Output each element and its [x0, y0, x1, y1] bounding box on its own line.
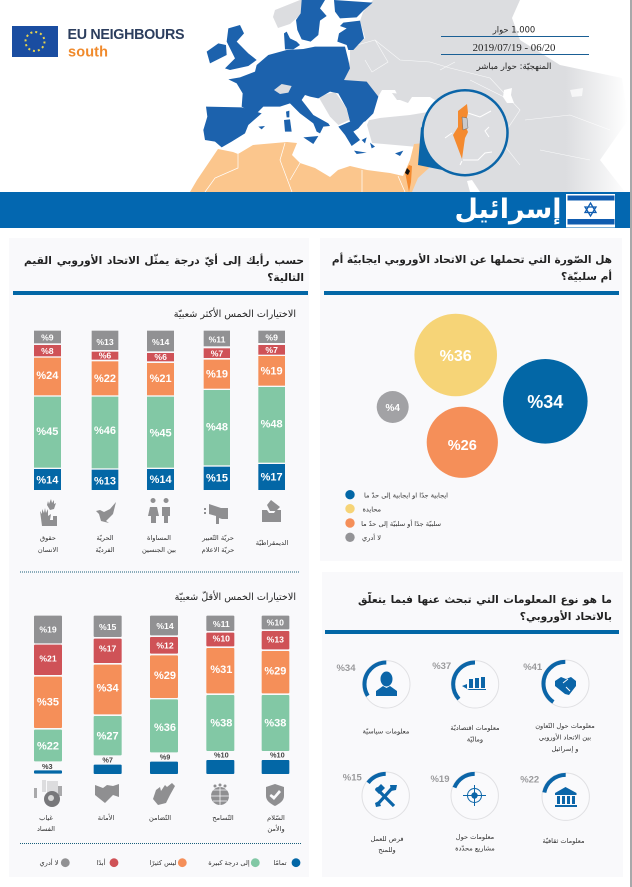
ring: cultural 22%: [520, 773, 589, 845]
subheading: least popular: الاختيارات الخمس الأقلّ شعبيّة: [175, 590, 296, 603]
label: peace and security: والأمن: [267, 824, 285, 833]
ring: projects 19%: معلومات حول: [456, 833, 494, 841]
ring: EU cooperation 41%: معلومات حول التّعاون: [535, 722, 595, 730]
bar: tolerance: %10: [213, 634, 230, 644]
label: absence of corruption: غياب: [39, 814, 53, 822]
header map: [190, 0, 628, 192]
bar: tolerance: %31: [210, 664, 232, 676]
panel: image of EU: [320, 238, 622, 561]
values legend: تمامًا: [273, 859, 287, 867]
bar: gender equality: %14: [152, 337, 170, 347]
bar: honesty: %7: [102, 756, 113, 765]
label: democracy: الديمقراطيّة: [256, 539, 288, 547]
bar: solidarity: %12: [156, 641, 174, 651]
label: gender equality: بين الجنسين: [142, 546, 176, 554]
heading: بالاتحاد الأوروبي؟: [520, 611, 612, 623]
bar: human rights: %24: [36, 370, 59, 382]
ring: projects 19%: مشاريع محدّدة: [455, 844, 495, 852]
bar: solidarity: %14: [156, 621, 174, 631]
logo wordmark: [68, 27, 184, 60]
values legend: أبدًا: [97, 858, 106, 867]
ring: economic 37%: %37: [432, 661, 451, 672]
bar: absence of corruption: %19: [39, 625, 57, 635]
ring: jobs and grants 15%: [343, 772, 409, 854]
bar: peace and security: [262, 616, 289, 774]
bar: human rights: %8: [41, 346, 54, 356]
values legend: لا أدري: [40, 858, 59, 867]
bar: freedom of expression: %48: [206, 422, 228, 434]
bar: freedom of expression: %15: [206, 473, 228, 485]
bar: honesty: %27: [97, 730, 119, 742]
bar: gender equality: %14: [150, 474, 173, 486]
bar: peace and security: %10: [267, 618, 284, 628]
icon: megaphone: [204, 504, 228, 524]
bar: individual freedom: %46: [94, 425, 116, 437]
ring: jobs and grants 15%: %15: [343, 772, 363, 784]
ring: political 34%: معلومات سياسيّة: [363, 728, 409, 736]
bar: democracy: %7: [265, 345, 278, 355]
panel: information sought: [322, 572, 623, 877]
bar: solidarity: %9: [160, 752, 170, 761]
country name: إسرائيل: [454, 194, 562, 225]
label: peace and security: [267, 814, 285, 833]
bar: gender equality: [147, 331, 174, 490]
ring: cultural 22%: %22: [520, 774, 539, 786]
ring: EU cooperation 41%: و إسرائيل: [552, 745, 578, 753]
bar: peace and security: %38: [264, 718, 286, 730]
bar: human rights: [34, 331, 61, 490]
values legend: إلى درجة كبيرة: [208, 859, 250, 867]
bubble chart: %4: [385, 403, 400, 414]
icon: dove: [96, 502, 116, 523]
ring: jobs and grants 15%: فرص للعمل: [370, 835, 404, 843]
icon: joined hands: [153, 783, 175, 805]
label: gender equality: المساواة: [147, 534, 171, 542]
icon: globe with people: [211, 784, 229, 805]
bar: honesty: [94, 616, 122, 774]
bar: absence of corruption: %35: [37, 697, 59, 709]
bar: honesty: %34: [97, 683, 120, 695]
logo wordmark: south: [68, 44, 108, 60]
label: absence of corruption: الفساد: [37, 825, 55, 833]
bar: gender equality: %21: [150, 373, 172, 385]
bar: honesty: %15: [99, 622, 117, 632]
bar: absence of corruption: [34, 616, 62, 774]
bubble chart: %34: [527, 392, 563, 412]
bubble chart: [377, 314, 588, 478]
panel: EU values: [9, 238, 309, 877]
bar: freedom of expression: %19: [206, 369, 228, 381]
bubble chart: %26: [448, 438, 477, 454]
bar: solidarity: %36: [154, 722, 176, 734]
ring: economic 37%: [432, 661, 500, 744]
label: freedom of expression: حريّة الاعلام: [202, 546, 234, 554]
icon: raised hands: [40, 499, 57, 526]
survey facts: المنهجيّة: حوار مباشر: [476, 62, 551, 72]
label: solidarity: التّضامن: [149, 814, 171, 822]
survey facts: 2019/07/19 - 06/20: [473, 42, 555, 54]
ring: political 34%: [336, 661, 410, 736]
bar: individual freedom: %6: [99, 351, 111, 361]
ring: projects 19%: [430, 772, 498, 852]
bar: democracy: %19: [261, 366, 283, 378]
label: individual freedom: [95, 534, 115, 554]
right edge line: [630, 0, 632, 887]
logo wordmark: EU NEIGHBOURS: [68, 27, 184, 43]
bar: honesty: %17: [99, 644, 117, 654]
ring: economic 37%: وماليّة: [467, 736, 483, 744]
label: honesty: الأمانة: [98, 813, 114, 822]
flag of Israel: [566, 194, 615, 228]
label: tolerance: التّسامح: [212, 814, 234, 822]
stacked bars: top five: [34, 331, 285, 490]
ring: EU cooperation 41%: بين الاتحاد الأوروبي: [539, 732, 591, 742]
ring: political 34%: %34: [336, 663, 356, 674]
bar: democracy: %9: [265, 332, 278, 342]
bar: human rights: %9: [41, 333, 54, 343]
ring: projects 19%: %19: [430, 774, 450, 785]
bar: peace and security: %29: [264, 666, 286, 678]
label: individual freedom: الحريّة: [96, 534, 114, 542]
bar: absence of corruption: %21: [39, 654, 57, 664]
bar: absence of corruption: %3: [42, 762, 53, 771]
subheading: most popular: الاختيارات الخمس الأكثر شعبيّة: [174, 307, 296, 320]
icon: man and woman: [148, 498, 170, 523]
bar: human rights: %14: [36, 475, 59, 487]
heading: [358, 592, 612, 632]
bubble chart: %36: [440, 348, 472, 365]
icon: shield: [266, 784, 284, 806]
survey facts: 1.000 حوار: [492, 24, 535, 34]
label: human rights: [38, 534, 58, 554]
bar: individual freedom: %22: [94, 373, 116, 385]
heading: [24, 253, 304, 293]
bar: solidarity: [150, 616, 178, 774]
bar: tolerance: %11: [213, 619, 230, 629]
bar: tolerance: [206, 616, 234, 774]
legend: سلبيّة جدًا أو سلبيّة إلى حدّ ما: [361, 519, 441, 528]
values legend: ليس كثيرًا: [149, 859, 177, 867]
ring: EU cooperation 41%: %41: [523, 662, 543, 673]
bar: tolerance: %10: [214, 750, 229, 759]
label: peace and security: السّلام: [267, 814, 285, 822]
ring: economic 37%: معلومات اقتصاديّة: [450, 724, 500, 732]
locator inset: Israel: [418, 90, 508, 175]
icon: ballot box: [262, 500, 281, 522]
bar: solidarity: %29: [154, 670, 176, 682]
icon: handshake: [95, 784, 119, 803]
bar: freedom of expression: %7: [211, 349, 223, 359]
icon: corruption: [34, 780, 62, 807]
bar: democracy: %17: [261, 472, 283, 484]
survey facts: [441, 24, 589, 72]
label: freedom of expression: [201, 534, 234, 554]
heading: أم سلبيّة؟: [561, 271, 612, 283]
bar: individual freedom: %13: [96, 337, 114, 347]
bar: tolerance: %38: [210, 718, 232, 730]
label: gender equality: [142, 534, 176, 554]
bar: individual freedom: [92, 331, 118, 490]
bar: gender equality: %45: [150, 428, 172, 440]
bar: peace and security: %10: [270, 750, 285, 759]
legend: [345, 490, 448, 542]
title banner: [0, 192, 630, 228]
heading: ما هو نوع المعلومات التي تبحث عنها فيما يتعلّق: [358, 594, 612, 606]
logo: EU flag: [12, 26, 58, 57]
heading: التالية؟: [267, 272, 304, 284]
legend: ايجابية جدًا او ايجابية إلى حدّ ما: [364, 492, 448, 500]
label: human rights: حقوق: [40, 534, 56, 542]
bar: human rights: %45: [36, 426, 58, 438]
bar: democracy: [258, 331, 285, 490]
heading: حسب رأيك إلى أيّ درجة يمثّل الاتحاد الأوروبي القيم: [24, 255, 304, 267]
ring: cultural 22%: معلومات ثقافيّة: [542, 837, 585, 845]
bar: absence of corruption: %22: [37, 740, 59, 752]
bar: gender equality: %6: [154, 352, 167, 362]
stacked bars: bottom five: [34, 616, 289, 774]
legend: لا أدري: [362, 533, 381, 542]
label: human rights: الانسان: [38, 546, 58, 554]
label: absence of corruption: [37, 814, 55, 833]
legend: محايدة: [362, 506, 381, 514]
bar: democracy: %48: [261, 419, 283, 431]
values legend: [40, 858, 300, 867]
bar: individual freedom: %13: [94, 475, 116, 487]
bar: freedom of expression: [204, 331, 230, 490]
label: freedom of expression: حريّة التّعبير: [201, 534, 234, 542]
label: individual freedom: الفرديّة: [95, 546, 115, 554]
bar: freedom of expression: %11: [209, 335, 226, 345]
heading: [328, 252, 612, 292]
ring: EU cooperation 41%: [523, 660, 595, 753]
bar: peace and security: %13: [267, 635, 284, 645]
ring: jobs and grants 15%: وللمنح: [378, 846, 396, 854]
